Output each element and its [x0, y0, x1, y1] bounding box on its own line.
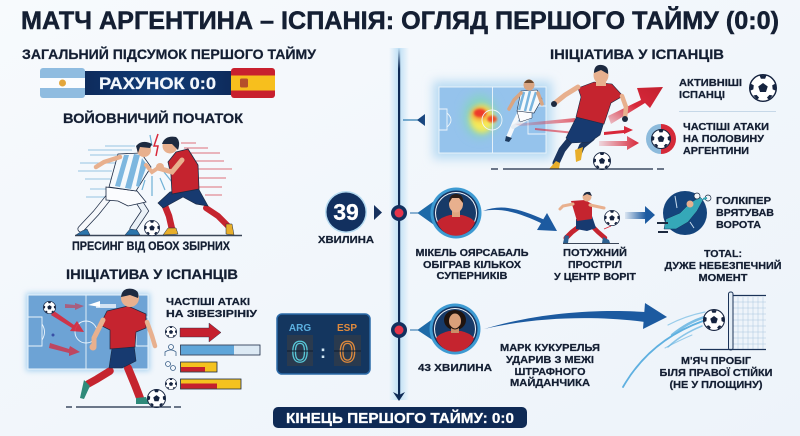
banner: end of first half: КІНЕЦЬ ПЕРШОГО ТАЙМУ: 0:0: [286, 409, 514, 427]
text: powerful cross: У ЦЕНТР ВОРІТ: [554, 271, 637, 283]
goal net: [700, 292, 766, 350]
panel: initiative left: [26, 266, 260, 408]
player: Spain: [156, 137, 234, 235]
timeline connector to heatmap: [403, 114, 425, 126]
portrait: Oyarzabal: [430, 188, 482, 238]
timeline marker: [391, 205, 407, 221]
heading: initiative: ІНІЦІАТИВА У ІСПАНЦІВ: [550, 46, 724, 62]
text: more frequent attacks: ЧАСТІШІ АТАКІ: [166, 297, 250, 308]
text: Oyarzabal: СУПЕРНИКІВ: [436, 270, 508, 282]
player: Spain dribbling: [80, 289, 155, 404]
pitch diagram: [26, 293, 150, 371]
text: attacks on Argentina's half: ЧАСТІШІ АТАКИ: [683, 122, 769, 133]
text: Cucurella shot: МАЙДАНЧИКА: [510, 376, 590, 389]
arrow to goalkeeper: [625, 206, 655, 224]
curved arrow: [483, 208, 557, 231]
heading: overall summary: ЗАГАЛЬНИЙ ПІДСУМОК ПЕРШОГО ТАЙМУ: [22, 47, 317, 62]
player: Argentina: [76, 142, 158, 235]
ball: [144, 220, 160, 236]
ball: [147, 389, 166, 408]
timeline axis: [389, 48, 409, 401]
text: more frequent attacks: [166, 297, 258, 320]
text: Cucurella shot: ШТРАФНОГО: [514, 366, 586, 378]
bar chart: attack stats: [165, 323, 260, 390]
panel: fierce start: [63, 111, 244, 253]
ball trail: [623, 312, 705, 387]
text: very dangerous moment: ДУЖЕ НЕБЕЗПЕЧНИЙ: [664, 259, 782, 272]
panel: overall summary: [22, 47, 317, 98]
heading: fierce start: ВОЙОВНИЧИЙ ПОЧАТОК: [63, 111, 244, 126]
text: goalkeeper saved: ВРЯТУВАВ: [716, 207, 774, 219]
panel: 43rd minute: [391, 292, 772, 391]
text: powerful cross: [554, 246, 637, 283]
banner: end of first half: [273, 407, 527, 428]
player: Argentina: [505, 80, 542, 142]
ball: [604, 210, 620, 226]
arrow to timeline: [374, 205, 382, 220]
text: more frequent attacks: НА ЗІВЕЗІРІНІУ: [166, 309, 258, 320]
panel: 39th minute: [318, 188, 782, 284]
caption: pressing: ПРЕСИНГ ВІД ОБОХ ЗБІРНИХ: [72, 241, 230, 253]
ball: [704, 310, 724, 330]
timeline marker: [391, 322, 407, 338]
curved arrow to goal: [484, 303, 667, 329]
score banner: [40, 68, 275, 98]
text: ball missed: М'ЯЧ ПРОБІГ: [681, 355, 751, 367]
player: Spain running: [549, 65, 628, 169]
text: Oyarzabal: [416, 247, 529, 282]
connector to portrait: [410, 199, 437, 227]
illustration: two players pressing: [75, 134, 242, 236]
scoreboard: 0: [292, 336, 308, 369]
text: ball missed: БІЛЯ ПРАВОЇ СТІЙКИ: [660, 366, 772, 379]
text: more active Spaniards: АКТИВНІШІ: [679, 78, 742, 89]
text: ball missed: [660, 355, 772, 391]
badge: minute 39: 39: [333, 199, 359, 225]
heading: initiative: ІНІЦІАТИВА У ІСПАНЦІВ: [66, 266, 238, 282]
text: very dangerous moment: МОМЕНТ: [698, 272, 748, 284]
scoreboard: ARG: [289, 323, 311, 334]
arrows: attack direction: [515, 87, 663, 150]
icon: ball: [750, 75, 776, 101]
icon: goalkeeper save: [657, 191, 711, 235]
text: very dangerous moment: [664, 248, 782, 284]
panel: initiative right: [433, 46, 776, 170]
scoreboard: ESP: [337, 323, 357, 334]
text: very dangerous moment: TOTAL:: [704, 248, 742, 260]
text: Cucurella shot: [500, 342, 600, 389]
text: attacks on Argentina's half: АРГЕНТИНИ: [683, 146, 749, 157]
text: more active Spaniards: ІСПАНЦІ: [679, 90, 725, 101]
text: goalkeeper saved: ГОЛКІПЕР: [716, 195, 771, 207]
scoreboard: 0: [339, 336, 356, 369]
text: attacks on Argentina's half: НА ПОЛОВИНУ: [683, 134, 765, 145]
text: goalkeeper saved: ВОРОТА: [716, 219, 761, 231]
ball: [593, 152, 611, 170]
text: Cucurella shot: МАРК КУКУРЕЛЬЯ: [500, 342, 600, 354]
text: powerful cross: ПРОСТРІЛ: [568, 259, 622, 271]
score banner: РАХУНОК 0:0: [99, 75, 216, 93]
player: shooting: [560, 192, 610, 243]
text: Oyarzabal: МІКЕЛЬ ОЯРСАБАЛЬ: [416, 247, 529, 259]
badge: minute 39: [318, 191, 374, 246]
text: powerful cross: ПОТУЖНИЙ: [563, 246, 627, 259]
scoreboard: [277, 314, 370, 374]
connector to portrait: [410, 318, 434, 341]
text: ball missed: (НЕ У ПЛОЩИНУ): [670, 379, 762, 391]
portrait: Cucurella: [430, 304, 480, 354]
icon: half blue half red ball: [646, 124, 676, 154]
text: minute 43: 43 ХВИЛИНА: [418, 362, 492, 374]
text: more active Spaniards: [679, 78, 742, 101]
text: attacks on Argentina's half: [683, 122, 769, 157]
heatmap pitch: [433, 81, 552, 159]
scoreboard: :: [320, 342, 326, 362]
text: Cucurella shot: УДАРИВ З МЕЖІ: [506, 354, 594, 366]
text: Oyarzabal: ОБІГРАВ КІЛЬКОХ: [423, 259, 521, 271]
badge: minute 39: ХВИЛИНА: [318, 234, 374, 246]
title: МАТЧ АРГЕНТИНА – ІСПАНІЯ: ОГЛЯД ПЕРШОГО ТАЙМУ (0:0): [21, 5, 779, 35]
text: goalkeeper saved: [716, 195, 774, 231]
